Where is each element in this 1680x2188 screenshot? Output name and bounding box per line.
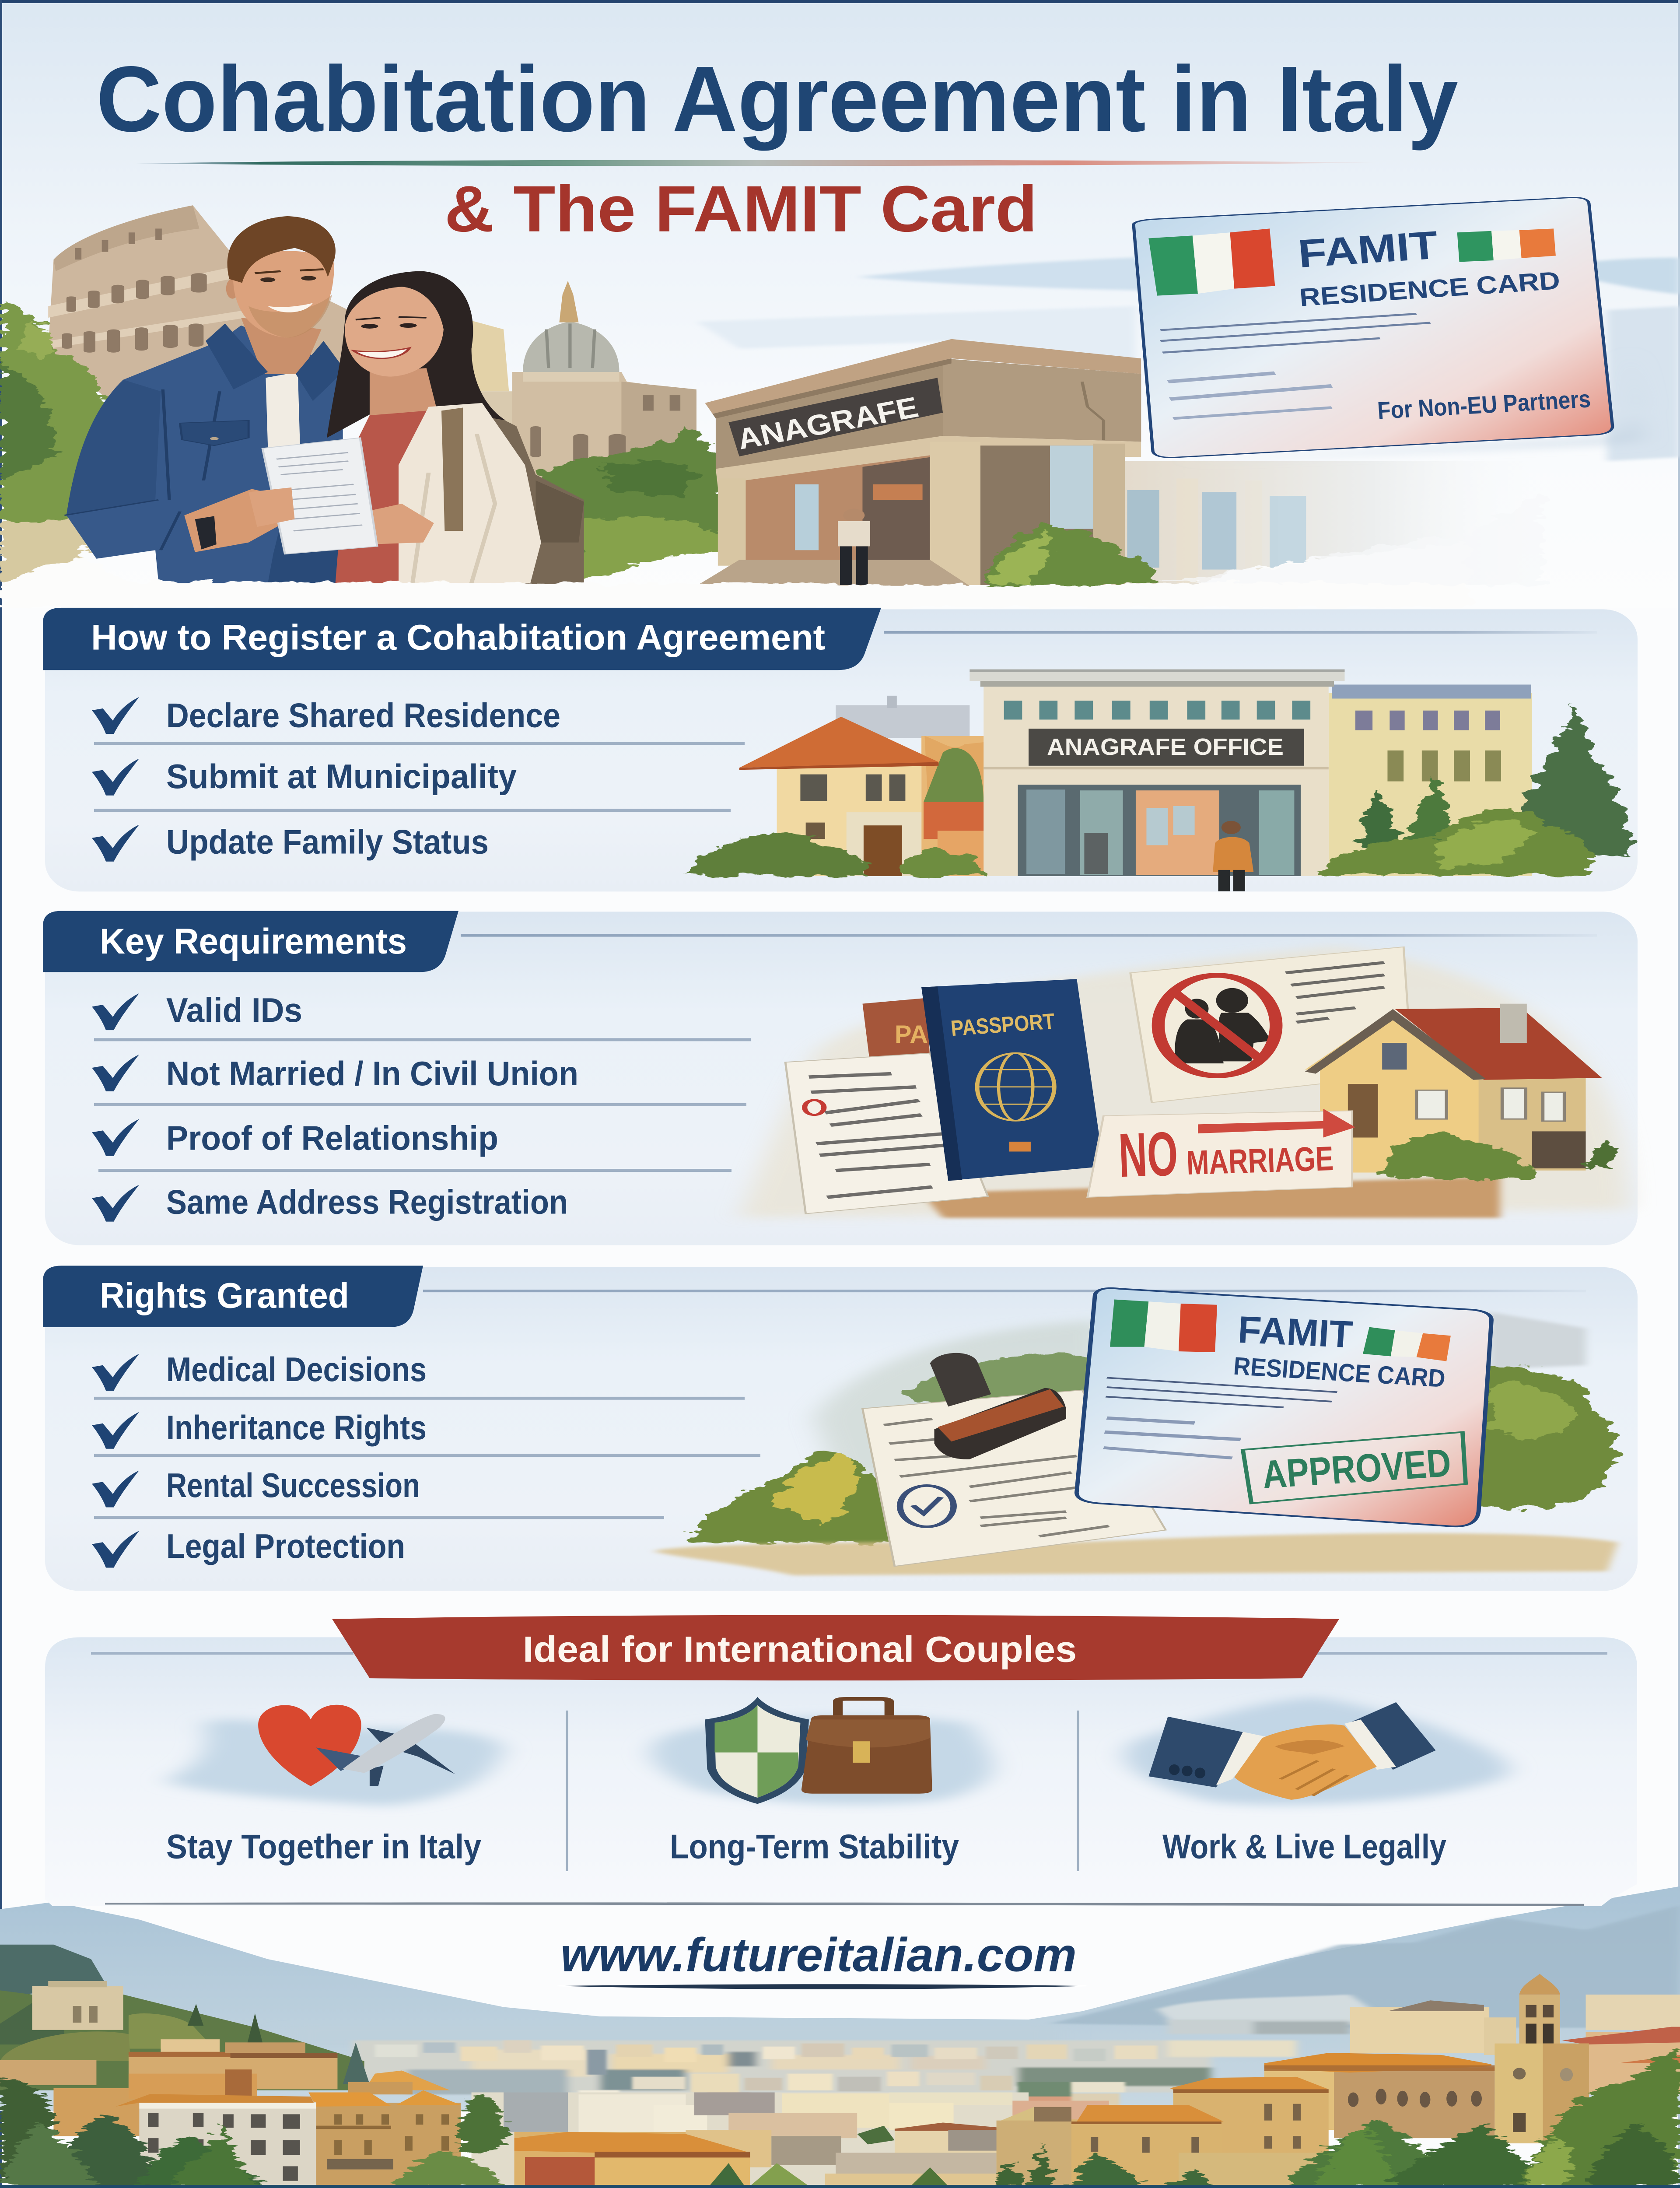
no marriage sign text bbox=[1117, 1119, 1334, 1190]
card residence label: RESIDENCE CARD bbox=[1298, 266, 1561, 312]
panel background bbox=[45, 1637, 1637, 1906]
item: rental succession bbox=[92, 1466, 420, 1507]
item: declare shared residence: Declare Shared Residence bbox=[166, 696, 560, 734]
item: same address: Same Address Registration bbox=[166, 1183, 568, 1221]
mountains bbox=[0, 1886, 1680, 2111]
document held by couple bbox=[248, 438, 377, 554]
icon: shield and briefcase bbox=[651, 1697, 992, 1804]
panel background bbox=[45, 609, 1638, 891]
stamp and card illustration bbox=[654, 1312, 1618, 1575]
item: submit at municipality: Submit at Municipality bbox=[166, 757, 517, 796]
hero illustration bbox=[0, 205, 1680, 607]
anagrafe sign text: ANAGRAFE bbox=[734, 391, 921, 456]
checklist bbox=[92, 696, 745, 862]
no marriage sign text: NO bbox=[1117, 1119, 1179, 1190]
item: valid ids bbox=[92, 991, 302, 1030]
card text lines bbox=[1160, 314, 1430, 418]
panel background bbox=[45, 912, 1638, 1245]
item: rental succession: Rental Succession bbox=[166, 1466, 420, 1504]
label: work and live legally: Work & Live Legally bbox=[1162, 1827, 1446, 1865]
item: proof of relationship: Proof of Relationship bbox=[166, 1119, 498, 1157]
card flag bbox=[1148, 228, 1275, 296]
panel rule bbox=[423, 1290, 1586, 1292]
anagrafe office illustration bbox=[686, 670, 1630, 891]
card famit label: FAMIT bbox=[1237, 1308, 1354, 1356]
item: valid ids: Valid IDs bbox=[166, 991, 302, 1029]
panel: how to register bbox=[43, 608, 1638, 891]
sky clouds bbox=[696, 256, 1680, 461]
woman bbox=[327, 271, 584, 585]
title divider bbox=[136, 160, 1378, 166]
passport back label: PA bbox=[895, 1020, 928, 1048]
colosseum bbox=[48, 205, 348, 399]
item: update family status bbox=[92, 823, 489, 862]
item: legal protection bbox=[92, 1527, 405, 1567]
icon: handshake bbox=[1125, 1697, 1508, 1805]
card residence label: RESIDENCE CARD bbox=[1232, 1352, 1446, 1393]
approved stamp: APPROVED bbox=[1260, 1441, 1452, 1497]
card body bbox=[1077, 1288, 1491, 1526]
website: www.futureitalian.com bbox=[560, 1928, 1077, 1981]
sky wash behind header bbox=[0, 0, 1680, 608]
panel heading tab bbox=[43, 911, 458, 972]
card famit label: FAMIT bbox=[1296, 223, 1440, 276]
item: update family status: Update Family Status bbox=[166, 823, 489, 861]
card flag bbox=[1110, 1300, 1451, 1361]
documents illustration bbox=[739, 946, 1628, 1218]
panel: ideal for international couples bbox=[45, 1615, 1637, 1906]
domed church bbox=[461, 281, 696, 480]
distant city haze bbox=[354, 2020, 1350, 2094]
person at the door bbox=[838, 509, 870, 585]
panel heading tab bbox=[43, 1266, 423, 1327]
item: inheritance rights bbox=[92, 1409, 427, 1449]
item: same address bbox=[92, 1183, 568, 1222]
item: medical decisions bbox=[92, 1350, 427, 1391]
panel rule bbox=[884, 631, 1597, 634]
column dividers bbox=[567, 1711, 1078, 1871]
panel: key requirements bbox=[43, 911, 1638, 1245]
panel heading tab bbox=[43, 608, 881, 670]
label: long-term stability: Long-Term Stability bbox=[670, 1827, 959, 1865]
distant houses bbox=[375, 2041, 1157, 2112]
item: not married: Not Married / In Civil Union bbox=[166, 1055, 578, 1093]
anagrafe building bbox=[696, 339, 1543, 586]
central town bbox=[472, 2092, 1109, 2188]
checklist bbox=[92, 1350, 760, 1567]
website underline bbox=[557, 1984, 1088, 1989]
panel rule bbox=[461, 934, 1597, 937]
trees bbox=[0, 302, 739, 581]
approved famit card bbox=[1077, 1288, 1491, 1526]
man bbox=[64, 216, 345, 583]
no marriage sign text: MARRIAGE bbox=[1186, 1139, 1334, 1182]
panel background bbox=[45, 1267, 1638, 1591]
panel: rights granted bbox=[43, 1266, 1638, 1591]
item: inheritance rights: Inheritance Rights bbox=[166, 1409, 427, 1447]
card shadow bbox=[1179, 349, 1639, 461]
shrub by building bbox=[985, 525, 1159, 585]
item: declare shared residence bbox=[92, 696, 560, 734]
panel heading: Key Requirements bbox=[100, 921, 407, 961]
approved stamp bbox=[1243, 1432, 1466, 1503]
famit residence card bbox=[1134, 197, 1639, 461]
panel heading: How to Register a Cohabitation Agreement bbox=[91, 617, 825, 657]
subtitle: & The FAMIT Card bbox=[444, 172, 1037, 245]
item: legal protection: Legal Protection bbox=[166, 1527, 405, 1565]
office sign text: ANAGRAFE OFFICE bbox=[1047, 734, 1284, 760]
banner bbox=[332, 1615, 1339, 1680]
card lines bbox=[1103, 1378, 1337, 1458]
card small flag bbox=[1457, 228, 1556, 262]
card partner note: For Non-EU Partners bbox=[1376, 385, 1592, 424]
footer divider bbox=[105, 1902, 1584, 1906]
left town bbox=[0, 1981, 507, 2187]
right town bbox=[991, 1974, 1680, 2186]
item: medical decisions: Medical Decisions bbox=[166, 1350, 427, 1389]
footer landscape bbox=[0, 1886, 1680, 2188]
label: stay together: Stay Together in Italy bbox=[166, 1827, 481, 1865]
panel rule bbox=[91, 1652, 1607, 1655]
passport label: PASSPORT bbox=[950, 1009, 1056, 1041]
title: Cohabitation Agreement in Italy bbox=[96, 47, 1458, 151]
banner heading: Ideal for International Couples bbox=[523, 1630, 1077, 1670]
icon: heart and plane bbox=[166, 1705, 504, 1806]
panel heading: Rights Granted bbox=[100, 1276, 349, 1315]
brushed ground edge bbox=[0, 492, 1543, 607]
footer bottom edge bbox=[0, 2185, 1680, 2188]
checklist bbox=[92, 991, 751, 1222]
card body bbox=[1134, 197, 1613, 457]
